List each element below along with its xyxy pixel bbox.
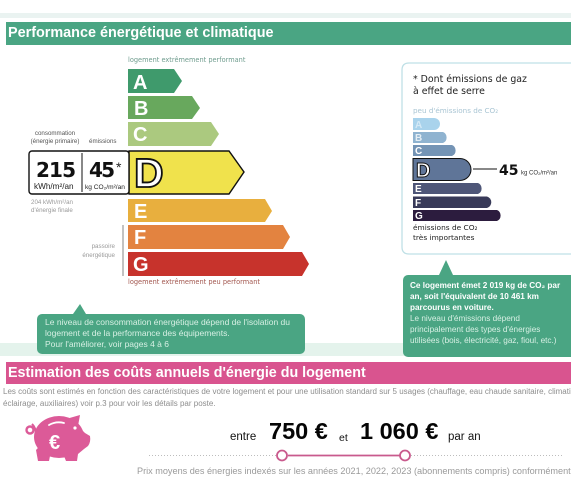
co2 band A (413, 118, 440, 130)
co2 band C (413, 145, 456, 156)
band D with values: * (116, 159, 122, 175)
band A (128, 69, 182, 94)
band D with values: kg CO₂/m²/an (85, 184, 125, 191)
band D with values: kWh/m²/an (34, 182, 74, 191)
band B: B (134, 98, 148, 120)
passoire bracket (122, 225, 124, 276)
title: costs (6, 362, 571, 384)
piggy bank icon: € (49, 432, 60, 454)
cost: entre: entre (230, 431, 256, 443)
co2 footnote heading (413, 74, 527, 96)
consumption caption: consommation (35, 130, 75, 137)
title: costs: Estimation des coûts annuels d'énergie du logement (8, 365, 366, 381)
cost: high value: 1 060 € (360, 418, 438, 444)
co2 scale bottom label: très importantes (413, 233, 474, 242)
co2 band G (413, 210, 501, 221)
callout: emissions (403, 260, 571, 357)
cost range slider (149, 450, 563, 460)
co2 footnote heading: à effet de serre (413, 86, 485, 96)
co2 scale top label: peu d'émissions de CO₂ (413, 106, 498, 115)
co2 chart: C (415, 146, 422, 157)
co2 chart: kg CO₂/m²/an (521, 170, 557, 176)
right panel outline (402, 63, 571, 254)
cost: et: et (339, 432, 348, 444)
title: performance: Performance énergétique et climatique (8, 25, 274, 41)
band D with values: D (134, 150, 164, 196)
co2 chart (413, 118, 557, 222)
co2 chart: G (415, 211, 423, 222)
co2 footnote heading: * Dont émissions de gaz (413, 74, 527, 85)
co2 chart: A (415, 120, 422, 131)
consumption caption (31, 130, 80, 145)
callout: consumption (37, 304, 305, 354)
final energy note: d'énergie finale (31, 206, 73, 214)
co2 scale bottom label: émissions de CO₂ (413, 223, 478, 232)
band C: C (133, 124, 147, 146)
passoire label: passoire (92, 243, 115, 250)
cost: par an: par an (448, 431, 481, 443)
co2 band F (413, 196, 491, 208)
callout: consumption: Le niveau de consommation énergétique dépend de l'isolation du (45, 317, 290, 327)
callout: consumption: Pour l'améliorer, voir pages 4 à 6 (45, 339, 169, 349)
band E (128, 199, 272, 223)
band A: A (133, 72, 147, 94)
callout: emissions: Le niveau d'émissions dépend (410, 314, 520, 323)
callout: emissions: Ce logement émet 2 019 kg de CO₂ par (410, 281, 560, 290)
co2 band D (413, 158, 471, 180)
label: top of scale: logement extrêmement performant (128, 56, 245, 64)
consumption caption: (énergie primaire) (31, 138, 79, 145)
co2 band B (413, 132, 447, 143)
band G: G (133, 254, 149, 276)
co2 chart: B (415, 133, 422, 144)
cost: low value: 750 € (269, 418, 328, 444)
band D with values (29, 150, 244, 196)
emissions caption: émissions (89, 138, 117, 145)
passoire label: énergétique (82, 252, 115, 258)
co2 chart: D (416, 160, 430, 182)
co2 scale bottom label (413, 223, 478, 242)
callout: emissions: parcourus en voiture. (410, 303, 494, 312)
band F (128, 225, 290, 249)
label: bottom of scale: logement extrêmement peu performant (128, 278, 260, 286)
final energy note: 204 kWh/m²/an (31, 199, 73, 206)
title: performance (6, 22, 571, 45)
co2 chart: F (415, 198, 421, 209)
band E: E (134, 201, 147, 223)
band F: F (134, 227, 146, 249)
band G (128, 252, 309, 276)
price note: Prix moyens des énergies indexés sur les années 2021, 2022, 2023 (abonnements compris) conformément (137, 466, 571, 476)
co2 band E (413, 183, 482, 194)
band D with values: 45 (89, 158, 115, 182)
cost intro text: éclairage, auxiliaires) voir p.3 pour voir les détails par poste. (3, 399, 216, 408)
co2 chart: E (415, 184, 422, 195)
callout: emissions: utilisées (bois, électricité, gaz, fioul, etc.) (410, 336, 557, 345)
callout: emissions: principalement des types d'énergies (410, 325, 540, 334)
callout: consumption: logement et de la performance des équipements. (45, 328, 230, 338)
co2 chart: 45 (499, 163, 518, 179)
piggy bank icon (26, 415, 90, 461)
band B (128, 96, 200, 120)
band D with values: 215 (36, 158, 76, 182)
callout: emissions: an, soit l'équivalent de 10 461 km (410, 292, 539, 301)
band C (128, 122, 219, 146)
cost intro text (3, 387, 571, 408)
final energy note (31, 199, 73, 214)
passoire label (82, 243, 115, 258)
